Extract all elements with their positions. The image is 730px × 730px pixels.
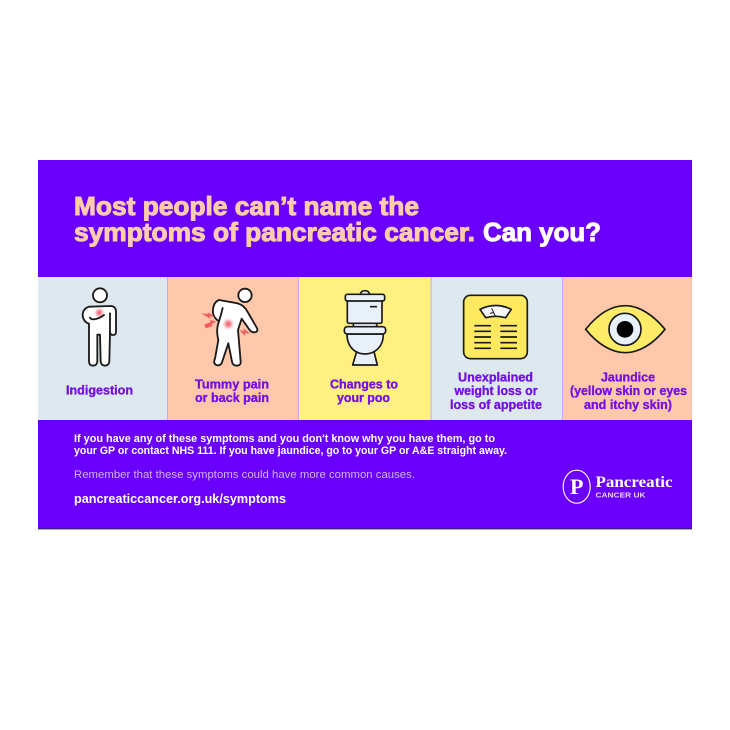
label: changes to poo: your poo — [337, 391, 390, 405]
heading: symptoms of pancreatic cancer. — [74, 217, 475, 247]
logo: Pancreatic Cancer UK: CANCER UK — [596, 490, 646, 500]
logo: Pancreatic Cancer UK: Pancreatic — [596, 474, 672, 491]
label: weight loss: Unexplained — [458, 370, 533, 384]
label: indigestion: Indigestion — [66, 384, 133, 398]
label: jaundice — [570, 370, 687, 412]
label: tummy pain — [195, 378, 269, 405]
icon: toilet — [344, 291, 386, 365]
icon: weighing scales — [464, 295, 527, 359]
panel: jaundice — [563, 277, 692, 420]
text block: reminder: Remember that these symptoms could have more common causes. — [74, 469, 415, 481]
bottom edge line — [38, 528, 692, 529]
label: jaundice: Jaundice — [601, 370, 655, 384]
icon: person with chest pain — [83, 288, 116, 366]
logo: Pancreatic Cancer UK: P — [570, 474, 583, 499]
panel: indigestion — [38, 277, 168, 420]
label: tummy pain: Tummy pain — [195, 378, 269, 392]
label: jaundice: and itchy skin) — [584, 398, 672, 412]
panel: background card — [38, 160, 692, 529]
icon: person with back pain — [202, 289, 257, 366]
logo: Pancreatic Cancer UK — [563, 470, 672, 503]
label: weight loss — [450, 370, 542, 412]
text block: advice: If you have any of these symptoms and you don't know why you have them, go to — [74, 433, 495, 445]
label: tummy pain: or back pain — [195, 391, 269, 405]
panel: symptom strip — [38, 277, 692, 420]
website link: pancreaticcancer.org.uk/symptoms — [74, 491, 286, 506]
label: changes to poo: Changes to — [330, 378, 398, 392]
heading — [74, 191, 601, 247]
panel: weight loss — [431, 277, 563, 420]
label: jaundice: (yellow skin or eyes — [570, 384, 687, 398]
heading: Most people can’t name the — [74, 191, 419, 221]
heading: Can you? — [483, 217, 601, 247]
label: weight loss: loss of appetite — [450, 398, 542, 412]
icon: yellow eye — [586, 306, 665, 353]
panel: tummy pain — [168, 277, 299, 420]
text block: advice — [74, 433, 507, 457]
label: weight loss: weight loss or — [454, 384, 538, 398]
text block: advice: your GP or contact NHS 111. If you have jaundice, go to your GP or A&E straight away. — [74, 445, 507, 457]
label: changes to poo — [330, 378, 398, 405]
panel: changes to poo — [299, 277, 431, 420]
